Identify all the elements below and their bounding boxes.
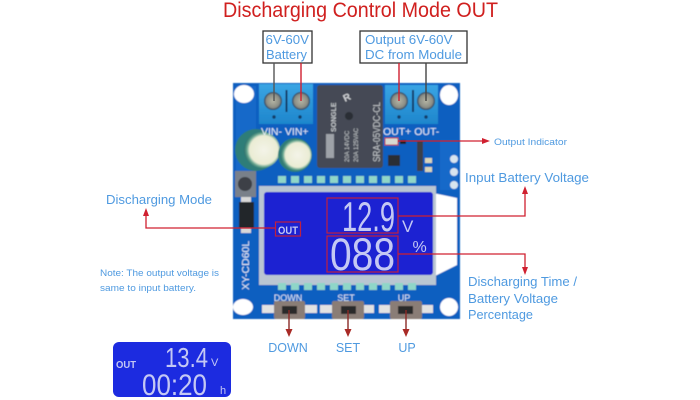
label: discharging time: Percentage (468, 308, 533, 322)
arrow: output indicator (398, 138, 490, 144)
button DOWN arrow and label (268, 310, 308, 355)
module board: 20A 14VDC (345, 130, 351, 162)
arrow: discharging time (398, 254, 528, 275)
LCD glass (259, 186, 436, 285)
LCD pins top (278, 176, 416, 183)
terminal labels: VIN- VIN+ (261, 126, 309, 138)
terminal blocks (259, 84, 313, 124)
small LCD example: V (211, 357, 219, 369)
module board: R (342, 91, 354, 105)
small LCD example: 13.4 (165, 342, 208, 373)
LCD readouts: 12.9 (342, 193, 395, 240)
button UP arrow and label: UP (398, 341, 416, 355)
module board: SRA-05VDC-CL (371, 102, 383, 162)
button SET arrow and label: SET (336, 341, 361, 355)
LCD pins bottom (278, 283, 416, 290)
module board: OUT+ OUT- (383, 126, 440, 138)
relay (317, 85, 383, 168)
callout: battery input (263, 31, 312, 63)
label: output indicator: Output Indicator (494, 137, 567, 148)
module board: SONGLE (331, 102, 338, 132)
button SET arrow and label (336, 310, 361, 355)
mounting holes (234, 85, 254, 103)
module board: UP (398, 293, 410, 303)
LCD readouts: V (402, 217, 414, 236)
LCD screen (264, 192, 433, 275)
label: discharging time (468, 275, 578, 322)
module board (233, 83, 460, 319)
arrow: discharging mode (143, 208, 275, 228)
button UP arrow and label (398, 310, 416, 355)
note: Note: The output voltage is (100, 268, 219, 279)
callout: module output (360, 31, 467, 63)
label: input battery voltage: Input Battery Voltage (465, 171, 589, 185)
highlight boxes on LCD (276, 198, 398, 272)
callout: battery input: Battery (266, 48, 308, 62)
label: discharging time: Discharging Time / (468, 275, 578, 289)
button DOWN arrow and label: DOWN (268, 341, 308, 355)
LCD readouts: 088 (330, 229, 395, 280)
model label: XY-CD60L (240, 241, 252, 290)
callout: module output: Output 6V-60V (365, 33, 453, 47)
module board: SET (337, 293, 355, 303)
note (100, 268, 219, 294)
callout: module output: DC from Module (365, 48, 462, 62)
module board: 20A 125VAC (354, 127, 360, 162)
label: discharging mode: Discharging Mode (106, 193, 212, 207)
capacitors (235, 129, 277, 171)
label: discharging time: Battery Voltage (468, 292, 558, 306)
wires to terminals (274, 63, 426, 101)
inductor and diode (235, 171, 256, 197)
small LCD example (113, 342, 231, 400)
arrow: input battery voltage (398, 186, 528, 216)
small LCD example: OUT (116, 359, 137, 371)
vias (450, 155, 458, 163)
button labels: DOWN (274, 293, 302, 303)
callout: battery input: 6V-60V (266, 33, 310, 47)
note: same to input battery. (100, 283, 196, 294)
LCD readouts: % (412, 239, 427, 256)
small LCD example: h (220, 385, 226, 397)
LCD readouts: OUT (278, 225, 298, 237)
buttons (262, 305, 317, 313)
board body (233, 83, 460, 319)
LCD readouts (278, 193, 427, 280)
output indicator LED and SMD parts (385, 138, 398, 145)
